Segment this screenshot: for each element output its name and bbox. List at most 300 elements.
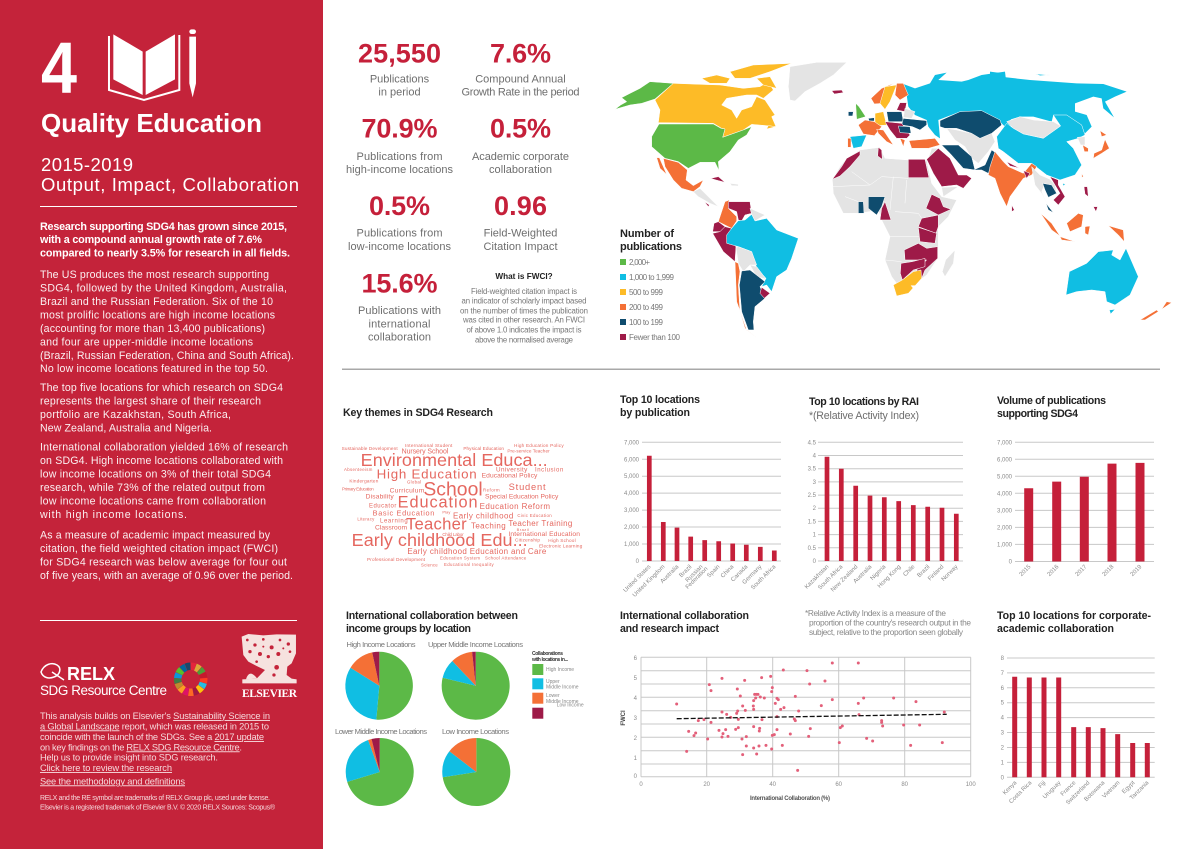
choropleth world map [615, 62, 1172, 338]
text block: academic impact [40, 530, 293, 582]
word cloud: Professional Development [367, 557, 426, 562]
stat: international collaboration: collaboration [368, 332, 431, 344]
y axis labels: 4 [634, 696, 638, 702]
y axis labels: 2,000 [624, 525, 640, 531]
panel: top 10 locations by publication [620, 394, 781, 599]
y axis labels: 1 [1001, 760, 1005, 766]
axis title: FWCI: FWCI [621, 710, 627, 726]
pie: high income locations [345, 640, 416, 720]
word cloud: Disability [366, 493, 394, 500]
callout: What is FWCI: was cited in other research. An FWCI [462, 316, 585, 325]
y axis labels: 3 [813, 480, 817, 486]
y axis labels: 2,000 [997, 525, 1013, 531]
text block: leading locations: No low income locations featured in the top 50. [40, 363, 268, 375]
x axis labels: Fiji [1038, 780, 1047, 790]
word cloud: Citizenship [515, 538, 540, 543]
text block: leading locations: (Brazil, Russian Federation, China and South Africa). [40, 350, 294, 362]
heading [620, 610, 749, 635]
word cloud: Basic Education [373, 508, 434, 517]
heading: Top 10 locations for corporate- [997, 610, 1151, 622]
y axis labels [1001, 656, 1005, 781]
logo: RELX SDG Resource Centre: RELX [67, 664, 115, 684]
x axis labels: 20 [703, 782, 711, 788]
word cloud: Education System [440, 556, 480, 561]
y axis labels: 7,000 [624, 440, 640, 446]
x axis labels [1019, 564, 1144, 578]
heading [997, 610, 1151, 635]
y axis labels [997, 440, 1013, 566]
word cloud: Environmental Educa... [361, 450, 548, 470]
stat: FWCI [484, 191, 558, 253]
x axis labels: 2019 [1130, 564, 1144, 578]
panel: international collaboration and research impact [620, 608, 976, 802]
map legend: 500 to 999 [629, 288, 664, 297]
y axis labels [634, 656, 638, 780]
word cloud: Early childhood [453, 511, 513, 520]
text block: key finding in bold: compared to nearly 3.5% for research in all fields. [40, 248, 290, 260]
pie: upper middle income locations: Upper Middle Income Locations [428, 640, 523, 649]
map legend [620, 228, 682, 342]
word cloud: Civic Education [517, 513, 552, 518]
x axis labels: Australia [853, 564, 874, 585]
stat: international collaboration [358, 268, 441, 344]
x axis labels: 60 [835, 782, 843, 788]
note: Relative Activity Index: subject, relative to the proportion seen globally [809, 627, 964, 637]
text block: academic impact: of five years, with an average of 0.96 over the period. [40, 570, 293, 582]
pie legend: Upper [546, 679, 560, 685]
x axis labels: New Zealand [830, 564, 859, 593]
y axis labels: 2 [634, 736, 638, 742]
word cloud: Play [442, 509, 450, 514]
x axis labels: Brazil [679, 564, 693, 579]
text block: about this analysis with links: Click here to review the research [40, 763, 172, 773]
map region: Asia and Oceania [988, 72, 1172, 320]
icon: open book and pencil [109, 29, 196, 100]
map legend: 200 to 499 [629, 303, 664, 312]
panel: top 10 locations for corporate-academic collaboration [997, 610, 1155, 806]
word cloud: Inclusion [535, 468, 563, 474]
goal number 4: 4 [41, 28, 77, 108]
x axis labels [1002, 780, 1151, 806]
pie legend: Collaborations [532, 651, 563, 657]
x axis labels: Russian [685, 564, 704, 584]
text block: academic impact: for SDG4 research was below average for four out [40, 556, 287, 568]
y axis labels [624, 440, 640, 565]
x axis labels: Tanzania [1129, 780, 1151, 801]
word cloud: Pre-service Teacher [507, 448, 550, 453]
y axis labels: 0 [813, 559, 817, 565]
stat: growth rate: Compound Annual [475, 74, 566, 86]
text block: research share [40, 382, 283, 434]
heading: Quality Education: Quality Education [41, 108, 262, 138]
stat: corporate collaboration: Academic corporate [472, 151, 569, 163]
y axis labels: 5,000 [624, 474, 640, 480]
stat: corporate collaboration [472, 113, 569, 176]
word cloud: High Education [377, 466, 477, 481]
pie: low income locations [442, 727, 510, 806]
word cloud: Education Reform [480, 502, 550, 511]
stat: publications [358, 39, 441, 98]
text block: academic impact: As a measure of academic impact measured by [40, 530, 271, 542]
stat: international collaboration: Publications with [358, 305, 441, 317]
word cloud: Special Education Policy [485, 493, 559, 500]
map region: Europe, Middle East and Africa [832, 72, 1012, 296]
y axis labels: 3 [1001, 730, 1005, 736]
y axis labels: 3,000 [624, 508, 640, 514]
y axis labels: 2 [1001, 746, 1005, 752]
text block: leading locations: SDG4, followed by the United Kingdom, Australia, [40, 282, 287, 294]
text block: international collaboration: low income locations on 3% of their total SDG4 [40, 468, 271, 480]
heading: academic collaboration [997, 623, 1114, 635]
heading: supporting SDG4 [997, 408, 1078, 420]
text block: about this analysis with links [40, 711, 270, 786]
word cloud: Learning [380, 518, 408, 524]
stat: publications: 25,550 [358, 39, 441, 69]
y axis labels: 1.5 [808, 519, 817, 525]
stat: FWCI: Field-Weighted [484, 228, 557, 240]
pie: upper middle income locations [428, 640, 523, 720]
word cloud: University [496, 466, 528, 473]
x axis labels: United Kingdom [632, 564, 666, 599]
word cloud: Student [509, 482, 546, 492]
callout: What is FWCI: an indicator of scholarly impact based [462, 296, 586, 306]
note: Relative Activity Index [805, 608, 971, 637]
heading: key themes: Key themes in SDG4 Research [343, 407, 493, 419]
panel: volume of publications [997, 395, 1154, 578]
y axis labels: 7,000 [997, 440, 1013, 446]
pie legend: Middle Income [546, 699, 579, 705]
word cloud: Teacher [406, 514, 467, 533]
text block: trademark notice [40, 795, 276, 812]
y axis labels: 5 [1001, 701, 1005, 707]
x axis labels: 2015 [1019, 564, 1033, 578]
x axis labels: Brazil [917, 564, 931, 579]
pie legend [531, 651, 584, 719]
y axis labels: 6,000 [624, 457, 640, 463]
heading [809, 396, 919, 422]
subheading: period and scope: Output, Impact, Collaboration [41, 174, 299, 195]
text block: leading locations [40, 269, 294, 375]
x axis labels: 2017 [1075, 564, 1089, 578]
text block: research share: portfolio are Kazakhstan, South Africa, [40, 409, 231, 421]
y axis labels: 6 [1001, 686, 1005, 692]
text block: international collaboration: research, while 73% of the related output from [40, 482, 265, 494]
x axis labels [804, 564, 959, 593]
note: Relative Activity Index: *Relative Activity Index is a measure of the [805, 608, 946, 618]
x axis labels [623, 564, 778, 599]
word cloud: Absenteeism [344, 467, 373, 472]
text block: key finding in bold: with a compound annual growth rate of 7.6% [39, 234, 262, 246]
heading [620, 394, 700, 419]
x axis labels: Egypt [1121, 780, 1137, 795]
text block: leading locations: and four are upper-middle income locations [40, 336, 253, 348]
y axis labels: 2 [813, 506, 817, 512]
word cloud: Reform [483, 488, 500, 493]
heading [997, 395, 1106, 420]
y axis labels: 4.5 [808, 440, 817, 446]
y axis labels: 0 [634, 774, 638, 780]
text block: leading locations: (accounting for more than 13,400 publications) [40, 323, 265, 335]
scatter plot grid [641, 657, 971, 777]
x axis labels: Uruguay [1042, 780, 1062, 800]
text block: key finding in bold [39, 221, 290, 260]
y axis labels: 3.5 [808, 467, 817, 473]
pie legend: Lower [546, 693, 560, 699]
x axis labels: Costa Rica [1008, 780, 1034, 805]
x axis labels: 2018 [1102, 564, 1116, 578]
y axis labels: 0.5 [808, 546, 817, 552]
x axis labels: 80 [901, 782, 909, 788]
x axis labels: United States [623, 564, 652, 594]
pie legend: High Income [546, 667, 574, 673]
text block: about this analysis with links: Help us to provide insight into SDG research. [40, 753, 218, 763]
subheading: period and scope: 2015-2019 [41, 154, 133, 175]
bars [825, 457, 959, 561]
text block: about this analysis with links: This analysis builds on Elsevier's Sustainability Science in [40, 711, 270, 721]
stat: low-income share: low-income locations [348, 241, 452, 253]
word cloud: Sustainable Development [342, 446, 398, 451]
heading: International collaboration [620, 610, 749, 622]
bars [647, 456, 777, 561]
x axis labels: Spain [706, 564, 721, 579]
y axis labels: 3 [634, 716, 638, 722]
y axis labels: 5,000 [997, 474, 1013, 480]
y axis labels: 0 [636, 559, 640, 565]
text block: trademark notice: Elsevier is a registered trademark of Elsevier B.V. © 2020 RELX Sources: Scopus® [40, 804, 276, 812]
callout: What is FWCI: above the normalised average [475, 335, 573, 344]
y axis labels: 8 [1001, 656, 1005, 662]
heading: International collaboration between [346, 610, 518, 622]
x axis labels: Hong Kong [877, 564, 902, 590]
word cloud: Teacher Training [508, 519, 572, 528]
y axis labels: 1 [634, 756, 638, 762]
pie: high income locations: High Income Locations [346, 640, 416, 649]
word cloud: Early childhood Education and Care [407, 547, 547, 556]
x axis labels: France [1060, 780, 1078, 798]
pie: lower middle income locations: Lower Middle Income Locations [335, 727, 427, 736]
stat: growth rate: 7.6% [490, 39, 551, 69]
stat: FWCI: 0.96 [494, 191, 547, 221]
y axis labels: 5 [634, 676, 638, 682]
y axis labels: 6 [634, 656, 638, 662]
heading: by publication [620, 407, 690, 419]
subheading: period and scope [41, 154, 299, 195]
bars [1024, 463, 1144, 562]
y axis labels: 1 [813, 533, 817, 539]
word cloud: Classroom [375, 525, 407, 532]
stat: publications: Publications [370, 74, 430, 86]
x axis labels: Kenya [1002, 780, 1019, 796]
x axis labels: Botswana [1084, 780, 1107, 803]
bars [1012, 677, 1150, 777]
stat: low-income share: Publications from [356, 228, 442, 240]
stat: corporate collaboration: 0.5% [490, 113, 551, 143]
y axis labels: 4,000 [624, 491, 640, 497]
x axis labels: Switzerland [1065, 780, 1091, 806]
x axis labels: Nigeria [870, 564, 888, 582]
text block: international collaboration: low income locations came from collaboration [40, 496, 266, 508]
text block: trademark notice: RELX and the RE symbol are trademarks of RELX Group plc, used under license. [40, 795, 270, 802]
x axis labels: China [720, 564, 736, 580]
text block: about this analysis with links: a Global Landscape report, which was released in 2015 to [40, 721, 269, 731]
y axis labels: 2.5 [808, 493, 817, 499]
x axis labels: 40 [769, 782, 777, 788]
y axis labels: 1,000 [997, 542, 1013, 548]
stat: low-income share [348, 191, 452, 253]
stat: publications: in period [378, 86, 421, 98]
pie legend: Middle Income [546, 685, 579, 691]
pie: low income locations: Low Income Locations [442, 727, 509, 736]
word cloud: Nursery School [402, 448, 449, 455]
word cloud: Science [421, 563, 438, 568]
word cloud: Electronic Learning [539, 544, 583, 549]
trend line [677, 714, 947, 719]
text block: leading locations: Brazil and the Russian Federation. Six of the 10 [40, 296, 273, 308]
word cloud: Kindergarten [349, 479, 379, 484]
word cloud: School Attendance [485, 555, 527, 560]
logo: Elsevier tree and wordmark: ELSEVIER [242, 688, 298, 700]
word cloud: Literacy [357, 516, 375, 521]
word cloud: Child Labor [442, 532, 464, 537]
pie legend: Low Income [557, 702, 584, 708]
text block: research share: New Zealand, Australia and Nigeria. [40, 422, 212, 434]
text block: about this analysis with links: on key findings on the RELX SDG Resource Centre. [40, 742, 242, 752]
x axis labels: Chile [902, 564, 917, 578]
word cloud: Teaching [471, 522, 506, 531]
map legend: 2,000+ [629, 258, 650, 267]
stat: high-income share: high-income locations [346, 164, 454, 176]
y axis labels: 6,000 [997, 457, 1013, 463]
stat: high-income share: Publications from [356, 151, 442, 163]
word cloud: Educational Inequality [444, 562, 494, 567]
note: Relative Activity Index: proportion of the country's research output in the [809, 618, 971, 628]
word cloud [342, 443, 583, 568]
map legend: 1,000 to 1,999 [629, 273, 675, 282]
x axis labels: 0 [639, 782, 643, 788]
text block: research share: represents the largest share of their research [40, 396, 261, 408]
logo: RELX SDG Resource Centre: SDG Resource Centre [40, 683, 167, 698]
stat: international collaboration: 15.6% [362, 268, 438, 298]
y axis labels: 1,000 [624, 542, 640, 548]
panel: left red sidebar [0, 0, 323, 849]
text block: research share: The top five locations for which research on SDG4 [40, 382, 283, 394]
word cloud: Education [398, 493, 478, 511]
text block: academic impact: citation, the field weighted citation impact (FWCI) [40, 543, 278, 555]
stat: growth rate [462, 39, 580, 98]
callout: What is FWCI: What is FWCI? [495, 272, 553, 281]
stat: high-income share [346, 113, 454, 176]
y axis labels: 3,000 [997, 508, 1013, 514]
x axis labels: Kazakhstan [804, 564, 830, 591]
x axis labels: South Africa [750, 564, 778, 591]
y axis labels: 0 [1001, 775, 1005, 781]
logo: Elsevier tree and wordmark [242, 634, 298, 700]
heading: *(Relative Activity Index) [809, 410, 919, 422]
x axis labels: Australia [660, 564, 681, 585]
x axis labels: Canada [730, 564, 750, 583]
map legend: 100 to 199 [629, 318, 664, 327]
stat: corporate collaboration: collaboration [489, 164, 552, 176]
word cloud: Educational Policy [482, 473, 538, 480]
text block: international collaboration: with high income locations. [39, 509, 187, 521]
text block: international collaboration: International collaboration yielded 16% of research [40, 442, 288, 454]
map legend: Number of [620, 228, 674, 240]
y axis labels: 4 [1001, 716, 1005, 722]
panel: international collaboration between income groups [335, 610, 584, 806]
callout: What is FWCI [460, 272, 588, 344]
panel: top 10 locations by RAI [804, 396, 963, 593]
word cloud: Early childhood Edu... [352, 530, 528, 550]
x axis labels: 2016 [1047, 564, 1061, 578]
stat: international collaboration: international [368, 319, 430, 331]
map legend: Fewer than 100 [629, 333, 681, 342]
heading: Top 10 locations [620, 394, 700, 406]
stat: growth rate: Growth Rate in the period [462, 86, 580, 98]
pie legend: with locations in... [531, 657, 569, 663]
logo: SDG colour wheel [178, 666, 204, 692]
map legend: publications [620, 241, 682, 253]
callout: What is FWCI: Field-weighted citation impact is [471, 287, 577, 296]
x axis labels: Federation [685, 566, 709, 591]
word cloud: International Education [508, 531, 580, 538]
text block: international collaboration [39, 442, 288, 521]
logo: RELX SDG Resource Centre [40, 664, 167, 698]
stat: FWCI: Citation Impact [484, 241, 558, 253]
heading: and research impact [620, 623, 719, 635]
heading: income groups by location [346, 623, 471, 635]
heading: Volume of publications [997, 395, 1106, 407]
scatter points [677, 663, 944, 770]
pie: lower middle income locations [335, 727, 427, 806]
y axis labels: 0 [1009, 560, 1013, 566]
word cloud: Physical Education [463, 446, 504, 451]
x axis labels: Germany [742, 564, 763, 586]
text block: about this analysis with links: See the methodology and definitions [40, 776, 185, 786]
panel: key statistics [346, 39, 588, 344]
y axis labels: 4 [813, 454, 817, 460]
text block: key finding in bold: Research supporting SDG4 has grown since 2015, [40, 221, 287, 233]
heading [346, 610, 518, 635]
y axis labels: 7 [1001, 671, 1005, 677]
word cloud: Primary Education [342, 486, 374, 491]
callout: What is FWCI: on the number of times the publication [460, 306, 588, 315]
word cloud: Brazil [517, 527, 529, 532]
x axis labels: 100 [966, 782, 976, 788]
text block: leading locations: most prolific locations are high income locations [40, 310, 275, 322]
word cloud: International Student [405, 443, 453, 448]
word cloud: High School [548, 538, 576, 543]
word cloud: Educator [369, 504, 396, 510]
axis title: international collaboration: International Collaboration (%) [750, 796, 830, 802]
text block: leading locations: The US produces the most research supporting [40, 269, 269, 281]
heading: Top 10 locations by RAI [809, 396, 919, 408]
x axis labels [639, 782, 976, 788]
callout: What is FWCI: of above 1.0 indicates the impact is [466, 326, 582, 335]
x axis labels: Norway [941, 564, 959, 583]
stat: high-income share: 70.9% [362, 113, 438, 143]
y axis labels [808, 440, 817, 565]
text block: about this analysis with links: coincide with the launch of the SDGs. See a 2017 update [40, 732, 264, 742]
x axis labels: Finland [927, 564, 945, 582]
word cloud: Curriculum [390, 488, 425, 495]
word cloud: School [423, 479, 483, 500]
x axis labels: South Africa [817, 564, 845, 591]
stat: low-income share: 0.5% [369, 191, 430, 221]
word cloud: High Education Policy [514, 443, 564, 448]
text block: international collaboration: on SDG4. High income locations collaborated with [40, 455, 283, 467]
word cloud: Global [407, 479, 421, 484]
map region: Americas [615, 62, 847, 338]
